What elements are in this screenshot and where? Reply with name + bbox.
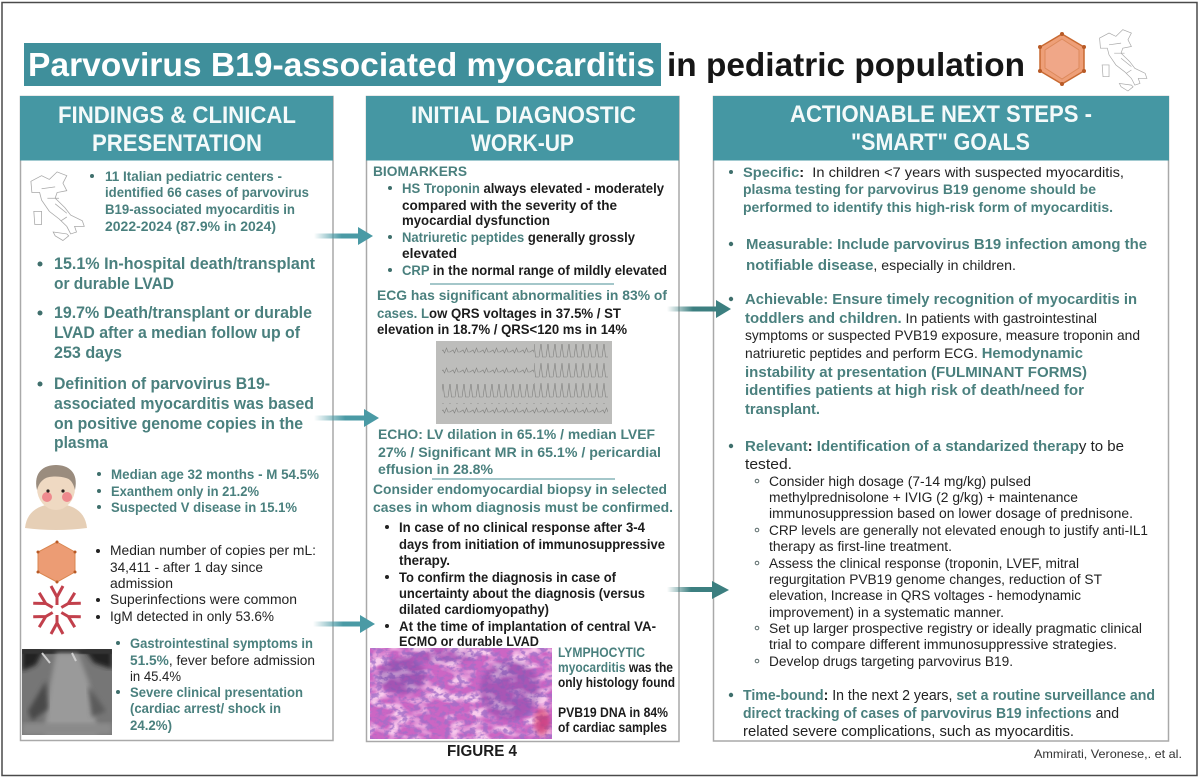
text: histology findings: LYMPHOCYTIC <box>558 645 645 660</box>
text: ECG findings: ECG has significant abnormalities in 83% of <box>377 287 667 303</box>
text: cohort: 11 Italian pediatric centers - <box>105 168 282 184</box>
text: symptoms: 51.5%, fever before admission <box>130 652 315 668</box>
text: relevant: Relevant: Identification of a standarized therapy to be <box>745 438 1124 455</box>
text: echo findings <box>378 426 661 477</box>
text: ECG findings <box>377 287 667 337</box>
figure label: FIGURE 4 <box>447 743 517 760</box>
heading: findings: FINDINGS & CLINICAL <box>58 102 296 129</box>
text: ECG findings: elevation in 18.7% / QRS<120 ms in 14% <box>377 321 628 337</box>
text: histology findings: only histology found <box>558 675 675 690</box>
text: relevant: trial to compare different immunosuppressive strategies. <box>769 637 1117 652</box>
text: histology findings: myocarditis was the <box>558 660 673 675</box>
text: relevant: therapy as first-line treatment. <box>769 539 952 554</box>
text: measurable <box>729 236 1147 274</box>
text: relevant: regurgitation PVB19 genome changes, reduction of ST <box>769 572 1102 587</box>
text: specific: performed to identify this high-risk form of myocarditis. <box>743 199 1113 215</box>
image: chest x-ray <box>22 649 112 735</box>
text: histology findings <box>558 645 675 735</box>
text: biopsy recommendation <box>373 481 673 649</box>
text: cohort: 2022-2024 (87.9% in 2024) <box>105 218 276 234</box>
text: relevant: methylprednisolone + IVIG (2 g/kg) + maintenance <box>769 490 1078 505</box>
text: cohort <box>90 168 309 234</box>
heading: work-up: WORK-UP <box>471 130 574 157</box>
text: outcomes: plasma <box>54 434 109 452</box>
heading: work-up: INITIAL DIAGNOSTIC <box>411 102 636 129</box>
text: time-bound <box>729 687 1155 740</box>
text: outcomes <box>38 255 315 452</box>
text: biopsy recommendation: uncertainty about the diagnosis (versus <box>399 585 645 601</box>
text: demographics <box>97 466 320 515</box>
text: biomarkers: myocardial dysfunction <box>402 213 550 228</box>
text: specific: plasma testing for parvovirus B19 genome should be <box>743 181 1096 197</box>
text: biopsy recommendation: At the time of implantation of central VA- <box>399 618 656 634</box>
text: achievable: Achievable: Ensure timely recognition of myocarditis in <box>745 291 1137 308</box>
text: biopsy recommendation: In case of no clinical response after 3-4 <box>399 519 645 535</box>
icon: parvovirus capsid <box>36 540 76 584</box>
text: achievable: toddlers and children. In patients with gastrointestinal <box>745 310 1097 327</box>
text: symptoms: Gastrointestinal symptoms in <box>130 635 313 651</box>
text: virology <box>96 542 316 624</box>
icon: antibodies <box>33 586 81 634</box>
text: relevant: Consider high dosage (7-14 mg/kg) pulsed <box>769 474 1031 489</box>
text: cohort: B19-associated myocarditis in <box>105 201 295 217</box>
text: virology: Superinfections were common <box>110 591 297 607</box>
text: time-bound: direct tracking of cases of parvovirus B19 infections and <box>743 705 1119 722</box>
text: ECG findings: cases. Low QRS voltages in 37.5% / ST <box>377 305 621 321</box>
image: histology <box>370 648 552 739</box>
text: relevant: tested. <box>745 456 792 473</box>
text: biopsy recommendation: days from initiation of immunosuppressive <box>399 536 665 552</box>
text: biopsy recommendation: ECMO or durable LVAD <box>399 633 539 649</box>
text: achievable: identifies patients at high risk of death/need for <box>745 382 1084 399</box>
text: relevant: CRP levels are generally not elevated enough to justify anti-IL1 <box>769 523 1148 538</box>
text: outcomes: on positive genome copies in the <box>54 415 303 433</box>
text: time-bound: Time-bound: In the next 2 years, set a routine surveillance and <box>743 687 1155 704</box>
title <box>24 43 1025 86</box>
panel: initial diagnostic work-up <box>366 96 679 742</box>
text: achievable: natriuretic peptides and perform ECG. Hemodynamic <box>745 345 1083 362</box>
text: virology: Median number of copies per mL: <box>110 542 316 558</box>
text: echo findings: 27% / Significant MR in 65.1% / pericardial <box>378 444 661 460</box>
text: relevant: Develop drugs targeting parvovirus B19. <box>769 654 1013 669</box>
heading: SMART goals <box>713 96 1169 160</box>
text: measurable: notifiable disease, especially in children. <box>746 257 1016 274</box>
text: symptoms: Severe clinical presentation <box>130 684 303 700</box>
text: achievable <box>729 291 1140 418</box>
icon: map of Italy (title) <box>1100 30 1147 91</box>
text: biomarkers: elevated <box>402 246 457 261</box>
text: outcomes: 253 days <box>54 344 122 362</box>
icon: map of Italy <box>31 172 84 240</box>
text: virology: IgM detected in only 53.6% <box>110 608 274 624</box>
text: echo findings: effusion in 28.8% <box>378 461 494 477</box>
icon: parvovirus capsid (title) <box>1038 32 1086 86</box>
text: symptoms: 24.2%) <box>130 717 172 733</box>
text: specific <box>729 164 1124 215</box>
text: echo findings: ECHO: LV dilation in 65.1% / median LVEF <box>378 426 655 442</box>
text: biopsy recommendation: dilated cardiomyopathy) <box>399 601 549 617</box>
icon: baby <box>25 465 87 530</box>
text: specific: Specific: In children <7 years with suspected myocarditis, <box>743 164 1124 180</box>
text: biomarkers: Natriuretic peptides generally grossly <box>402 230 635 245</box>
text: biomarkers: BIOMARKERS <box>373 164 467 179</box>
text: demographics: Exanthem only in 21.2% <box>111 483 260 499</box>
arrow: findings to biopsy <box>313 615 375 633</box>
text: relevant: Assess the clinical response (troponin, LVEF, mitral <box>769 556 1079 571</box>
text: outcomes: or durable LVAD <box>54 275 174 293</box>
arrow: ECG to achievable <box>667 300 731 318</box>
text: cohort: identified 66 cases of parvovirus <box>105 184 309 200</box>
image: ECG trace <box>436 341 612 424</box>
text: biopsy recommendation: cases in whom diagnosis must be confirmed. <box>373 499 673 515</box>
text: outcomes: LVAD after a median follow up of <box>54 324 300 342</box>
text: measurable: Measurable: Include parvovirus B19 infection among the <box>746 236 1147 253</box>
text: relevant: Set up larger prospective registry or ideally pragmatic clinical <box>769 621 1142 636</box>
text: symptoms: (cardiac arrest/ shock in <box>130 700 281 716</box>
text: achievable: instability at presentation (FULMINANT FORMS) <box>745 364 1087 381</box>
text: achievable: symptoms or suspected PVB19 exposure, measure troponin and <box>745 327 1140 343</box>
heading: work-up <box>366 96 679 160</box>
text: outcomes: Definition of parvovirus B19- <box>54 375 270 393</box>
citation: Ammirati, Veronese,. et al. <box>1034 747 1182 761</box>
panel: actionable next steps <box>713 96 1169 741</box>
text: outcomes: 15.1% In-hospital death/transplant <box>54 255 315 273</box>
text: relevant: elevation, Increase in QRS voltages - hemodynamic <box>769 588 1081 603</box>
heading: SMART goals: "SMART" GOALS <box>851 129 1030 156</box>
text: relevant <box>729 438 1148 669</box>
panel: findings and clinical presentation <box>20 96 333 740</box>
heading: findings <box>20 96 333 160</box>
title highlighted part: Parvovirus B19-associated myocarditis <box>28 46 655 83</box>
text: outcomes: associated myocarditis was based <box>54 395 314 413</box>
arrow: biopsy to relevant <box>667 581 729 599</box>
title plain part: in pediatric population <box>667 46 1025 83</box>
text: demographics: Median age 32 months - M 54.5% <box>111 466 320 482</box>
text: biomarkers: HS Troponin always elevated - moderately <box>402 181 664 196</box>
text: demographics: Suspected V disease in 15.1% <box>111 499 298 515</box>
text: biopsy recommendation: therapy. <box>399 552 450 568</box>
arrow: findings to biomarkers <box>314 227 373 245</box>
arrow: findings to echo <box>314 409 379 427</box>
text: virology: 34,411 - after 1 day since <box>110 559 263 575</box>
text: biomarkers: compared with the severity of the <box>402 198 617 213</box>
text: biomarkers <box>373 164 667 278</box>
text: histology findings: of cardiac samples <box>558 720 667 735</box>
heading: findings: PRESENTATION <box>92 130 262 157</box>
heading: SMART goals: ACTIONABLE NEXT STEPS - <box>790 101 1092 128</box>
text: achievable: transplant. <box>745 401 820 418</box>
text: relevant: improvement) in a systematic manner. <box>769 605 1004 620</box>
text: symptoms: in 45.4% <box>130 668 181 684</box>
text: histology findings: PVB19 DNA in 84% <box>558 705 668 720</box>
text: time-bound: related severe complications, such as myocarditis. <box>743 723 1074 740</box>
text: virology: admission <box>110 575 173 591</box>
text: biomarkers: CRP in the normal range of mildly elevated <box>402 263 667 278</box>
text: symptoms <box>116 635 315 733</box>
text: outcomes: 19.7% Death/transplant or durable <box>54 304 312 322</box>
text: relevant: immunosuppression based on lower dosage of prednisone. <box>769 506 1133 521</box>
text: biopsy recommendation: To confirm the diagnosis in case of <box>399 569 616 585</box>
text: biopsy recommendation: Consider endomyocardial biopsy in selected <box>373 481 667 497</box>
